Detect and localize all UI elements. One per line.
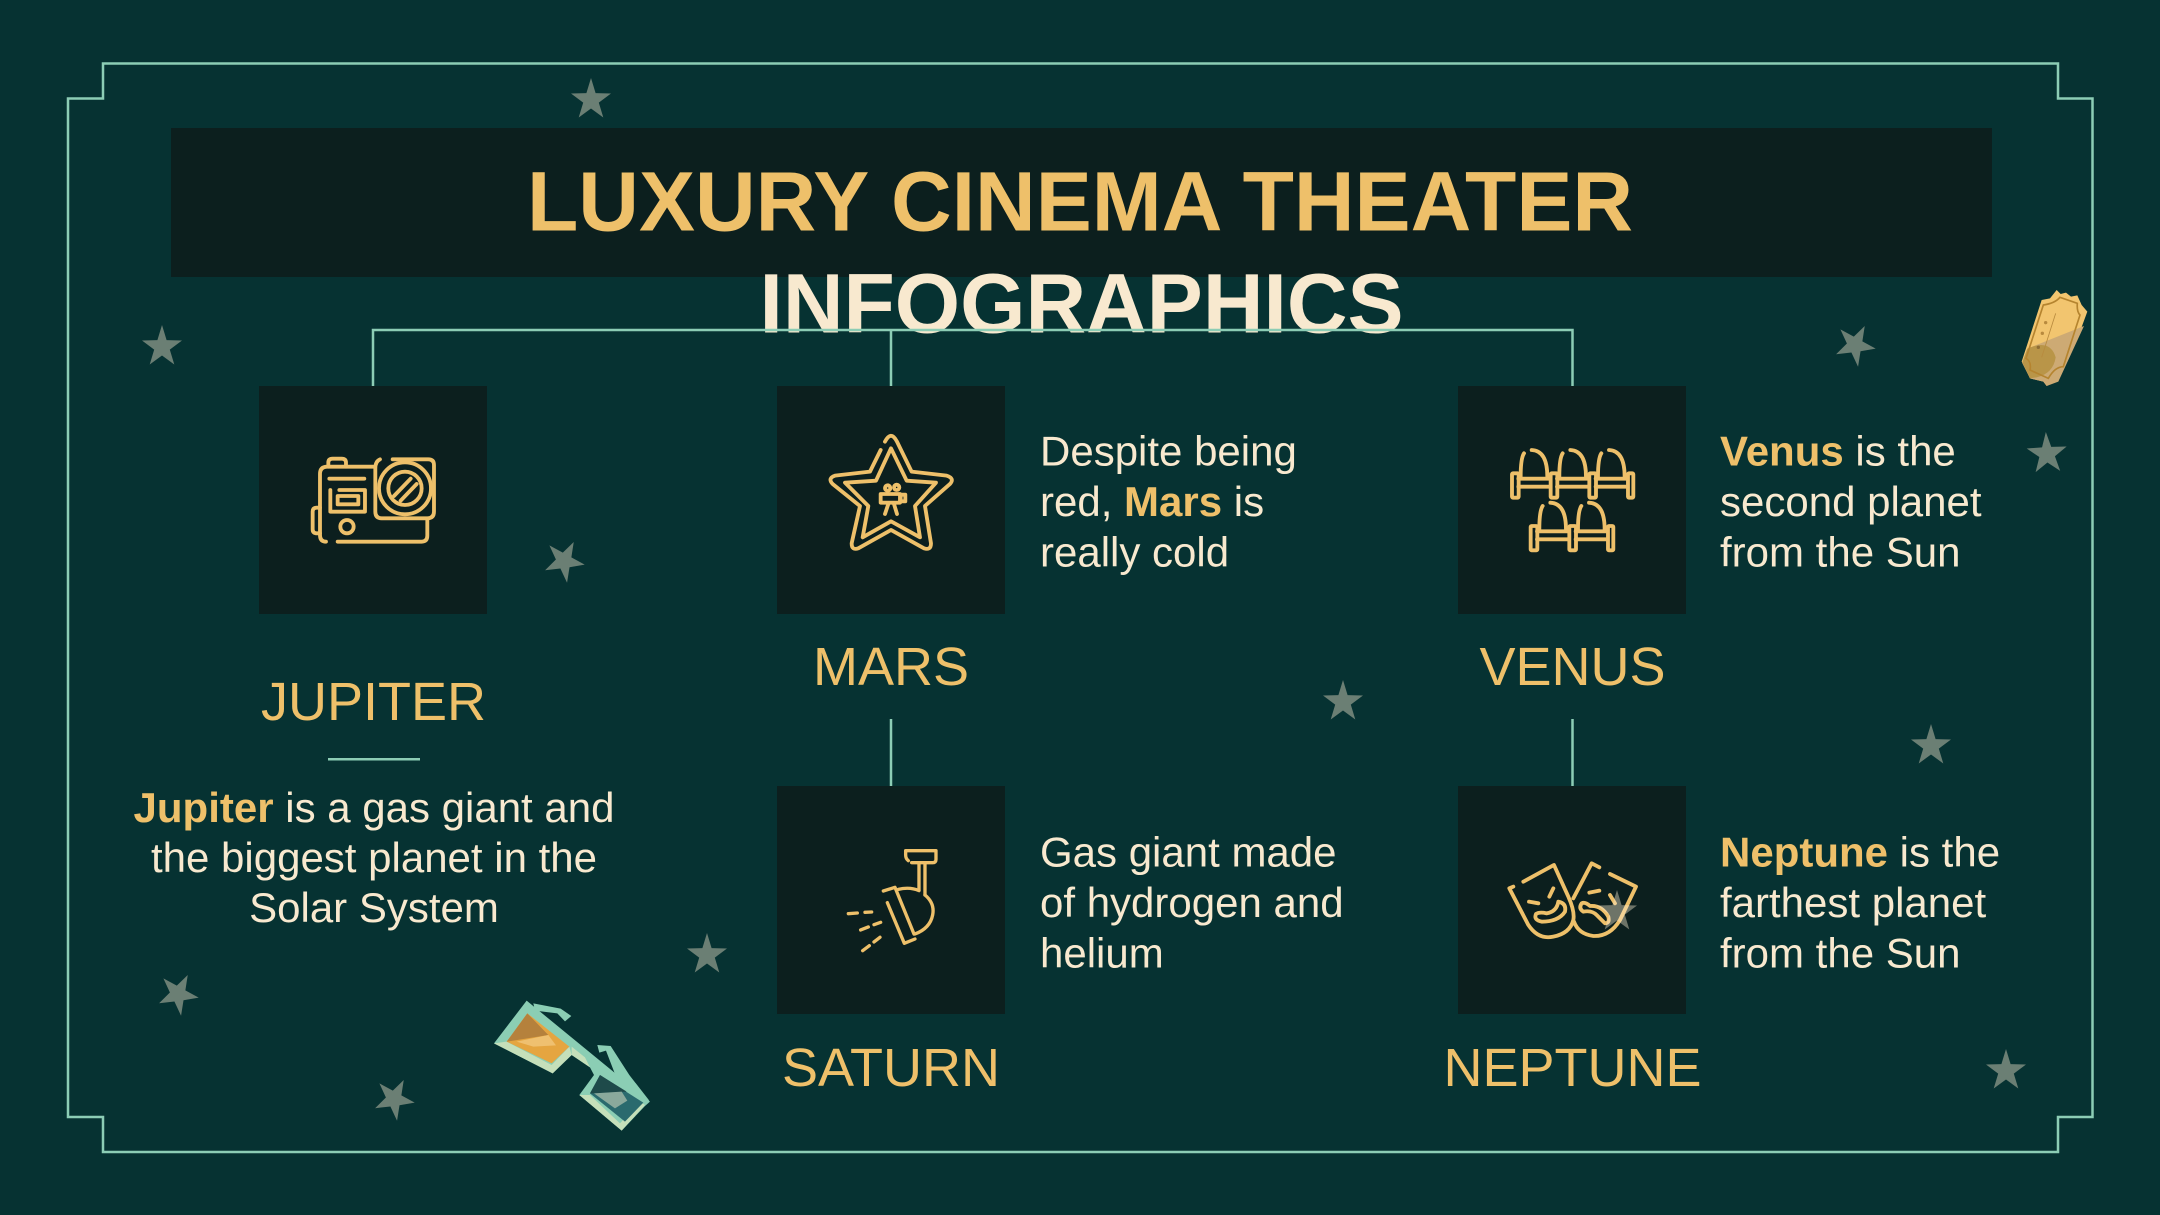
mars text: Despite being: [1040, 428, 1297, 474]
neptune text: Neptune is the: [1720, 828, 2000, 876]
panel: neptune: [1443, 786, 2000, 1098]
jupiter text: Solar System: [249, 884, 499, 931]
icon: action camera: [313, 459, 434, 542]
saturn text: of hydrogen and: [1040, 879, 1344, 926]
mars text: red, Mars is: [1040, 478, 1264, 525]
title: LUXURY CINEMA THEATER: [527, 154, 1633, 248]
decorative stars: [142, 78, 2068, 1124]
neptune icon box: [1458, 786, 1686, 1014]
neptune text: farthest planet: [1720, 879, 1987, 926]
venus text: [1720, 428, 1982, 576]
icon: spotlight: [848, 851, 936, 951]
panel: venus: [1458, 386, 1982, 697]
venus text: Venus is the: [1720, 428, 1956, 474]
icon: theater masks: [1509, 863, 1636, 937]
saturn text: [1040, 828, 1344, 976]
icon: cinema seats: [1512, 450, 1633, 550]
title banner: [171, 128, 1992, 277]
saturn text: helium: [1040, 930, 1164, 976]
icon: ticket: [2022, 290, 2087, 386]
venus text: from the Sun: [1720, 528, 1960, 576]
mars heading: MARS: [813, 637, 969, 697]
jupiter text: the biggest planet in the: [151, 834, 597, 881]
neptune text: [1720, 828, 2000, 976]
jupiter divider: [328, 758, 420, 760]
panel: mars: [777, 386, 1297, 697]
panel: jupiter: [134, 386, 614, 931]
mars text: really cold: [1040, 528, 1229, 576]
title: [527, 154, 1633, 350]
jupiter text: [134, 784, 614, 931]
saturn heading: SATURN: [782, 1038, 1000, 1098]
saturn text: Gas giant made: [1040, 828, 1337, 876]
neptune text: from the Sun: [1720, 930, 1960, 976]
venus heading: VENUS: [1479, 637, 1666, 697]
mars text: [1040, 428, 1297, 576]
connector lines: [373, 330, 1572, 787]
jupiter icon box: [259, 386, 487, 614]
panel: saturn: [777, 786, 1344, 1098]
icon: 3D glasses: [494, 1001, 650, 1131]
icon: star with movie camera: [830, 436, 952, 549]
jupiter heading: JUPITER: [261, 672, 486, 732]
venus icon box: [1458, 386, 1686, 614]
mars icon box: [777, 386, 1005, 614]
venus text: second planet: [1720, 478, 1982, 525]
saturn icon box: [777, 786, 1005, 1014]
title: INFOGRAPHICS: [759, 256, 1404, 350]
jupiter text: Jupiter is a gas giant and: [134, 784, 614, 831]
neptune heading: NEPTUNE: [1443, 1038, 1702, 1098]
